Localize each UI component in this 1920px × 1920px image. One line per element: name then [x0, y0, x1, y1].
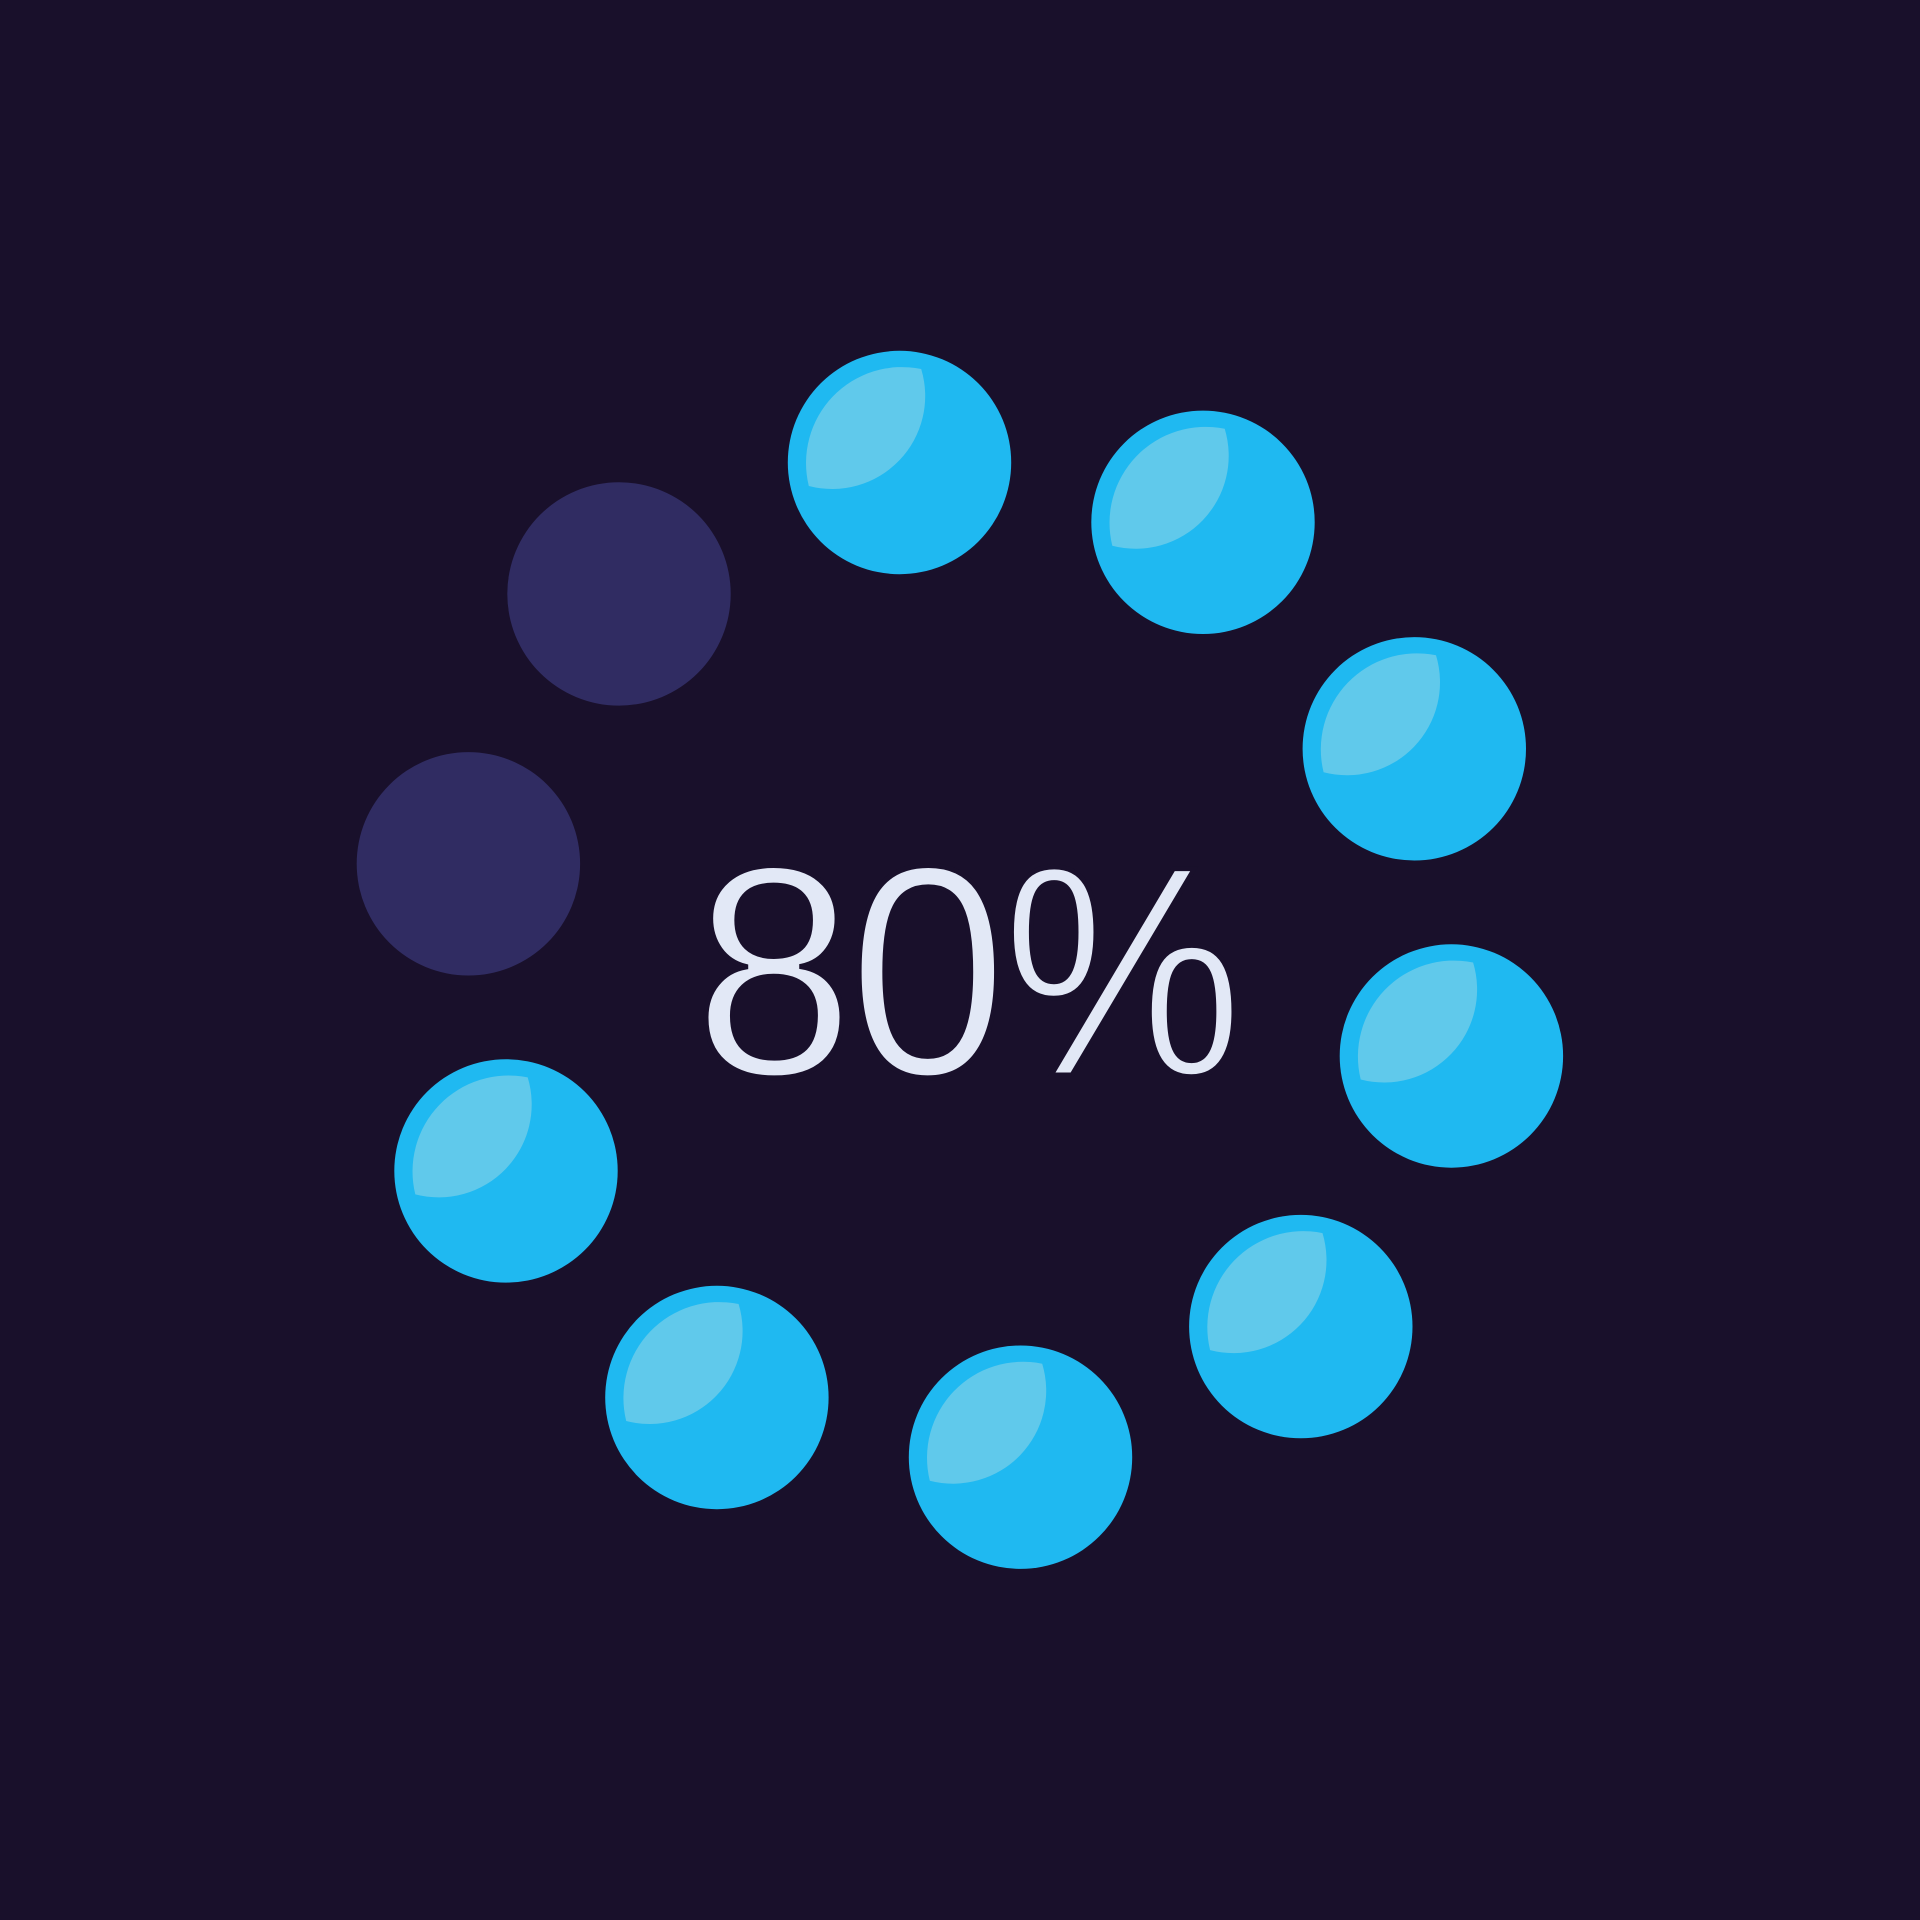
dot 10: empty: [507, 482, 731, 706]
dot 2: filled: [1091, 411, 1315, 634]
percentage label: [694, 803, 1243, 1139]
dot 1: filled: [788, 351, 1011, 574]
dot 9: empty: [357, 752, 580, 976]
dot 8: filled: [394, 1059, 618, 1283]
percentage label: 0: [848, 804, 1008, 1139]
dot 5: filled: [1189, 1215, 1412, 1438]
percentage label: 8: [694, 804, 855, 1139]
percentage label: %: [1002, 803, 1243, 1139]
dot 4: filled: [1340, 944, 1563, 1168]
dot 7: filled: [605, 1286, 829, 1509]
dot 6: filled: [909, 1346, 1132, 1569]
dot 3: filled: [1303, 637, 1526, 860]
